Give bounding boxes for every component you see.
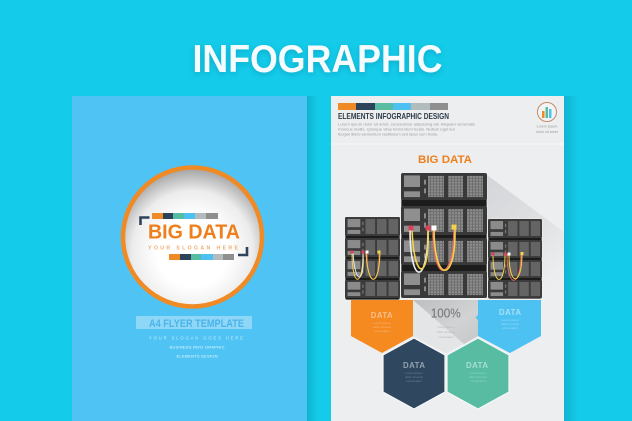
title: INFOGRAPHIC: [192, 38, 442, 81]
logo text: BIG DATA: [148, 222, 240, 244]
hexagon: blue data: Lorem ipsum: [501, 318, 519, 322]
hexagon: green data: consectetur: [470, 379, 486, 383]
intro text: feugiat libero elementum vestibulum sed lacus sem ibulla.: [338, 132, 438, 136]
cables: [493, 254, 522, 280]
hexagon: green data: dolor sit amet: [469, 375, 487, 379]
hexagon: navy data: [383, 338, 445, 409]
slogan: YOUR SLOGAN HERE: [148, 246, 239, 252]
title: INFOGRAPHIC: [192, 40, 442, 83]
flyer subtitle: BUSINESS INFO GRAPHIC: [170, 344, 225, 350]
hexagon: navy data: DATA: [403, 361, 425, 370]
hexagon: navy data: Lorem ipsum: [405, 371, 423, 375]
intro text: [338, 122, 475, 136]
hexagon: orange data: consectetur: [374, 329, 390, 333]
hexagon: green data: [447, 338, 509, 409]
flyer tagline: YOUR SLOGAN GOES HERE: [149, 336, 243, 340]
hexagon: blue data: dolor sit amet: [501, 322, 519, 326]
long shadow: [487, 175, 564, 300]
colour strip: upper: [152, 213, 218, 219]
big data heading: BIG DATA: [418, 154, 472, 166]
hexagon: grey 100%: Lorem ipsum: [437, 325, 455, 329]
hexagon: orange data: dolor sit amet: [373, 325, 391, 329]
cable plugs: [492, 252, 524, 256]
hexagon: blue data: consectetur: [502, 326, 518, 330]
flyer subtitle: [170, 344, 225, 358]
hexagon: green data: DATA: [466, 361, 488, 370]
hexagon: grey 100%: consectetur: [438, 335, 454, 339]
panel: infographic page: [331, 96, 564, 421]
server rack: left: [345, 217, 400, 300]
page heading: ELEMENTS INFOGRAPHIC DESIGN: [338, 111, 449, 121]
intro text: Lorem ipsum dolor sit amet, consectetur adipiscing elit. Aliquam venenatis: [338, 122, 475, 126]
panel: flyer cover: [72, 96, 307, 421]
intro text: rhoncus mollis. Quisque vitae fermentum turpis. Nullam eget leo: [338, 128, 455, 132]
flyer banner: A4 FLYER TEMPLATE: [149, 318, 244, 330]
icon caption: [536, 124, 558, 134]
hexagon: orange data: Lorem ipsum: [373, 321, 391, 325]
colour strip: [338, 103, 448, 110]
hexagon: grey 100%: dolor sit amet: [437, 330, 455, 334]
badge: big data circle: [123, 168, 262, 306]
colour strip: lower: [169, 254, 234, 260]
hexagon: orange data: DATA: [371, 311, 393, 320]
cables: [352, 253, 380, 279]
server rack: centre: [401, 173, 487, 298]
flyer subtitle: ELEMENTS DESIGN: [176, 354, 218, 358]
hexagon: orange data: [351, 300, 416, 353]
icon caption: Lorem ipsum: [537, 124, 557, 128]
server rack: right: [488, 219, 542, 299]
hexagon: grey 100%: 100%: [431, 307, 461, 321]
hexagon: blue data: [476, 300, 541, 353]
icon caption: dolor sit amet: [536, 130, 558, 134]
icon: bar chart badge: [538, 102, 556, 122]
hexagon: green data: Lorem ipsum: [469, 371, 487, 375]
bracket: bottom right: [238, 247, 247, 255]
bracket: top left: [140, 218, 150, 225]
hexagon: navy data: consectetur: [406, 379, 422, 383]
hexagon: navy data: dolor sit amet: [405, 375, 423, 379]
cable plugs: [408, 224, 456, 230]
hexagon: grey 100%: [413, 300, 478, 353]
hexagon: blue data: DATA: [499, 308, 521, 317]
cables: [410, 229, 455, 272]
cable plugs: [350, 250, 380, 254]
